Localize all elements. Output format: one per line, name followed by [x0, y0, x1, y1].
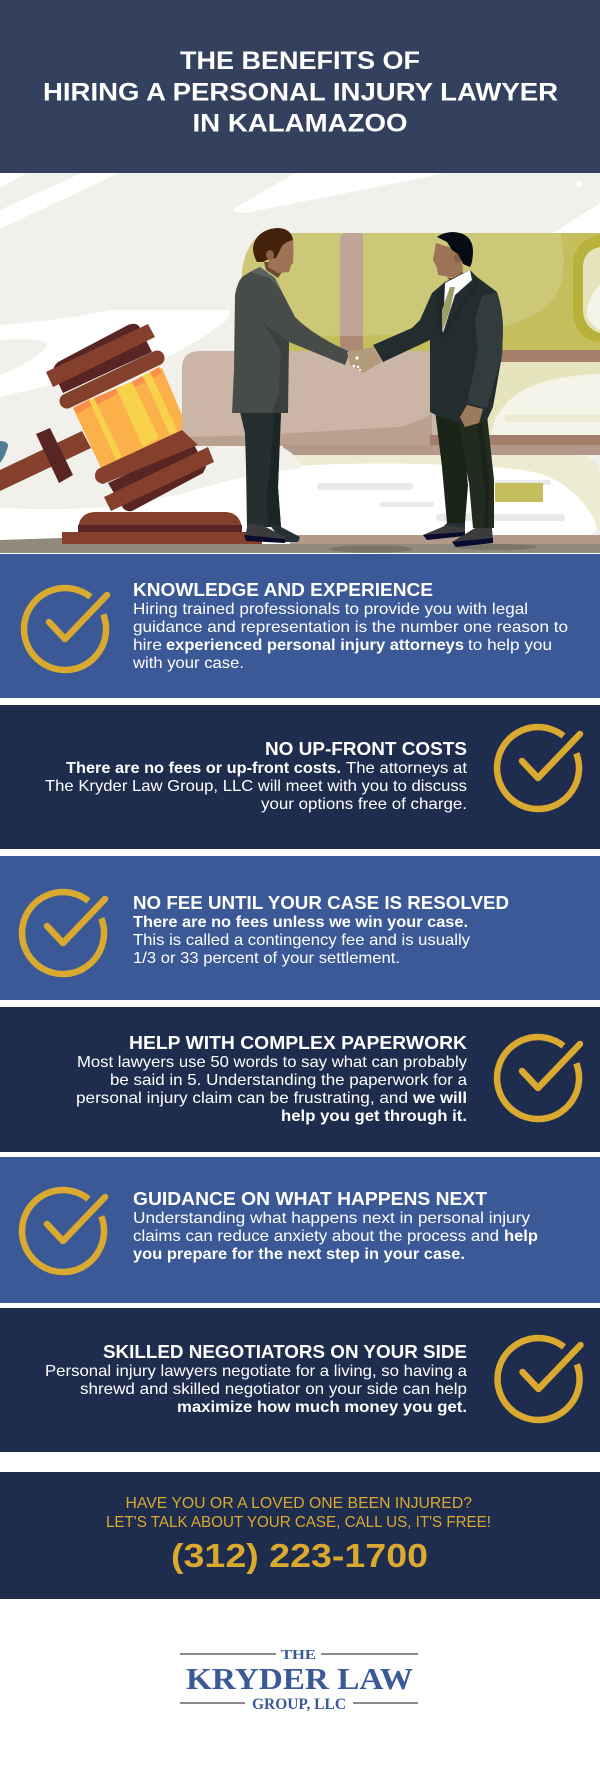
wall panel: olive — [242, 233, 600, 352]
logo: The Kryder Law Group: KRYDER LAW — [186, 1661, 413, 1696]
body text: Understanding what happens next in personal injury — [133, 1210, 530, 1227]
icon: check mark — [22, 1190, 105, 1272]
panel: skilled negotiators — [0, 1308, 600, 1452]
logo: The Kryder Law Group: GROUP, LLC — [252, 1696, 346, 1713]
body text — [76, 1054, 467, 1125]
body text — [45, 760, 468, 813]
heading: NO FEE UNTIL YOUR CASE IS RESOLVED — [133, 892, 509, 913]
title: IN KALAMAZOO — [192, 110, 408, 138]
illustration: handshake scene — [0, 173, 600, 554]
body text: your options free of charge. — [261, 796, 467, 813]
sofa and shelves — [0, 350, 600, 545]
heading: SKILLED NEGOTIATORS ON YOUR SIDE — [103, 1341, 467, 1362]
panel: header — [0, 0, 600, 173]
heading: KNOWLEDGE AND EXPERIENCE — [133, 579, 433, 600]
phone number: (312) 223-1700 — [171, 1537, 428, 1574]
body text: maximize how much money you get. — [177, 1399, 467, 1416]
body text: 1/3 or 33 percent of your settlement. — [133, 950, 400, 967]
title: THE BENEFITS OF — [180, 47, 420, 75]
icon: check mark — [22, 892, 105, 974]
body text: guidance and representation is the number one reason to — [133, 619, 568, 636]
panel: call to action — [0, 1472, 600, 1599]
panel: help with complex paperwork — [0, 1007, 600, 1152]
body text: personal injury claim can be frustrating, and — [76, 1090, 408, 1107]
icon: gavel — [0, 324, 262, 544]
body text: Personal injury lawyers negotiate for a living, so having a — [45, 1363, 467, 1380]
icon: check mark — [497, 1037, 580, 1119]
logo: The Kryder Law Group: THE — [281, 1648, 316, 1663]
body text: shrewd and skilled negotiator on your side can help — [80, 1381, 467, 1398]
panel: guidance on what happens next — [0, 1157, 600, 1303]
body text: be said in 5. Understanding the paperwork for a — [110, 1072, 467, 1089]
body text: There are no fees or up-front costs. — [66, 760, 341, 777]
body text: with your case. — [132, 655, 244, 672]
call to action text: HAVE YOU OR A LOVED ONE BEEN INJURED? — [126, 1495, 472, 1512]
icon: check mark — [24, 588, 107, 670]
body text: experienced personal injury attorneys — [166, 637, 464, 654]
body text: to help you — [468, 637, 552, 654]
heading: HELP WITH COMPLEX PAPERWORK — [129, 1032, 468, 1053]
body text: help you get through it. — [281, 1108, 467, 1125]
body text: help — [504, 1228, 538, 1245]
body text: you prepare for the next step in your case. — [133, 1246, 465, 1263]
call to action text — [106, 1495, 491, 1531]
body text: we will — [412, 1090, 467, 1107]
panel: knowledge and experience — [0, 554, 600, 698]
body text: Most lawyers use 50 words to say what can probably — [77, 1054, 467, 1071]
title — [43, 47, 558, 138]
heading: NO UP-FRONT COSTS — [265, 738, 467, 759]
floor — [0, 538, 600, 554]
body text — [45, 1363, 467, 1416]
logo: The Kryder Law Group — [180, 1648, 418, 1713]
body text: The Kryder Law Group, LLC will meet with you to discuss — [45, 778, 467, 795]
body text: The attorneys at — [346, 760, 468, 777]
body text: There are no fees unless we win your case. — [133, 914, 468, 931]
icon: handshake — [347, 347, 382, 373]
icon: check mark — [497, 727, 580, 809]
title: HIRING A PERSONAL INJURY LAWYER — [43, 78, 558, 106]
body text — [133, 914, 470, 967]
body text: hire — [133, 637, 162, 654]
heading: GUIDANCE ON WHAT HAPPENS NEXT — [133, 1188, 488, 1209]
panel: no fee until resolved — [0, 856, 600, 1000]
body text: claims can reduce anxiety about the process and — [133, 1228, 499, 1245]
figure: left lawyer — [232, 228, 350, 543]
body text — [133, 1210, 538, 1263]
body text — [132, 601, 568, 672]
figure: right lawyer — [373, 232, 503, 547]
call to action text: LET'S TALK ABOUT YOUR CASE, CALL US, IT'S FREE! — [106, 1514, 491, 1531]
body text: Hiring trained professionals to provide you with legal — [133, 601, 528, 618]
body text: This is called a contingency fee and is usually — [133, 932, 470, 949]
icon: check mark — [498, 1338, 580, 1420]
panel: no up-front costs — [0, 705, 600, 849]
